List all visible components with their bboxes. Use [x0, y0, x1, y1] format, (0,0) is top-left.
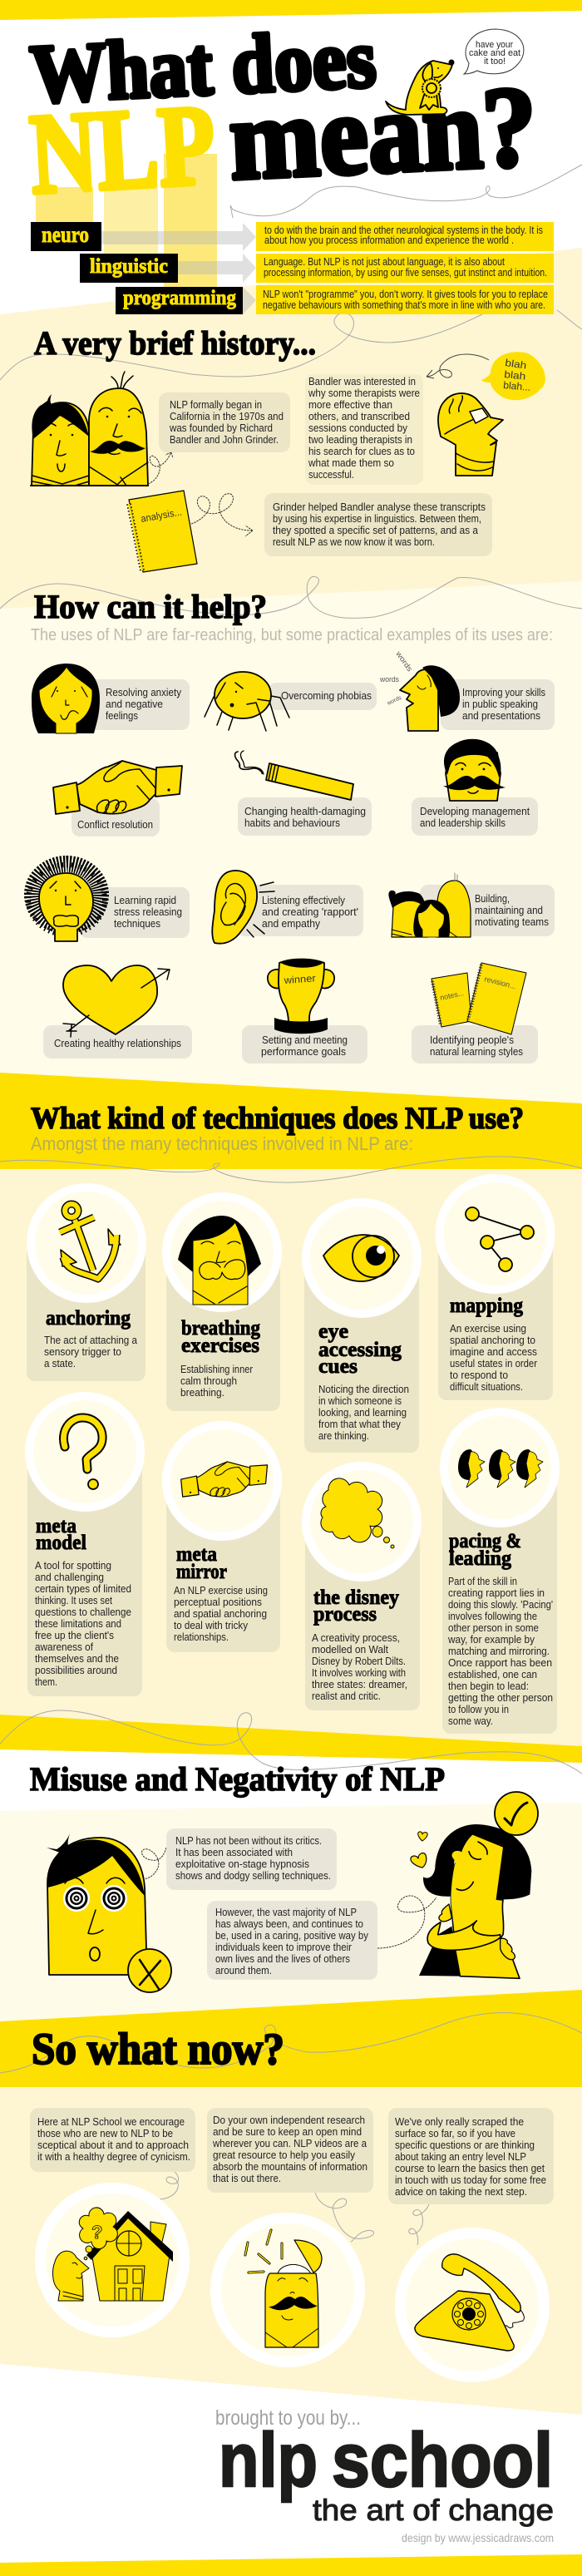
icon: cigarette: [235, 751, 353, 800]
note: formally began: NLP formally began in: [170, 398, 262, 411]
card: meta mirror: [162, 1421, 282, 1652]
bubble: phobias: [268, 683, 377, 710]
definition: neuro: [256, 222, 554, 251]
footer: the art of change: the art of change: [313, 2493, 554, 2527]
icon: trophy: winner: [283, 972, 316, 986]
help item: goals: Setting and meeting: [262, 1034, 348, 1046]
title: NLP: NLP: [27, 81, 218, 218]
help item: teams: motivating teams: [475, 915, 549, 928]
squiggle from critics note: [141, 1848, 166, 1879]
icon: trophy: [268, 960, 334, 1034]
card: meta mirror: An NLP exercise using: [174, 1584, 268, 1596]
card: meta model: certain types of limited: [35, 1582, 131, 1595]
note: research: absorb the mountains of information: [213, 2160, 367, 2173]
arrow: neuro: [97, 223, 256, 251]
icon: hugging woman: [419, 1824, 531, 1978]
help item: anxiety: Resolving anxiety: [106, 686, 181, 698]
card: the disney process: It involves working with: [312, 1666, 406, 1679]
card: pacing and leading: to follow you in: [448, 1703, 509, 1715]
card: mapping: to respond to: [450, 1369, 508, 1381]
card: the disney process: realist and critic.: [312, 1690, 381, 1702]
note: Bandler: more effective than: [308, 398, 392, 411]
note: critics: It has been associated with: [175, 1846, 293, 1858]
note: formally began: was founded by Richard: [169, 422, 273, 434]
card: pacing and leading: involves following the: [448, 1610, 537, 1622]
background: techniques area: [0, 1169, 582, 1751]
icon: hearts: [411, 1832, 427, 1868]
card: anchoring: [27, 1183, 146, 1381]
card: pacing and leading: way, for example by: [447, 1633, 535, 1646]
definition: linguistic: [256, 254, 554, 283]
card: eye accessing cues: accessing: [318, 1339, 402, 1361]
bubble: teams: [420, 885, 555, 936]
help item: learning styles: Identifying people's: [430, 1034, 514, 1046]
card: meta model: A tool for spotting: [35, 1559, 111, 1572]
words floating: [379, 649, 414, 707]
help item: habits: Changing health-damaging: [244, 805, 366, 817]
note: Grinder: by using his expertise in linguistics. Between them,: [273, 512, 481, 525]
note: get in touch: specific questions or are thinking: [395, 2139, 535, 2151]
note: get in touch: surface so far, so if you have: [395, 2127, 515, 2139]
help item: stress: stress releasing: [114, 906, 182, 918]
label: neuro: [31, 222, 101, 251]
card: pacing and leading: Part of the skill in: [448, 1575, 517, 1587]
help item: listening: [212, 871, 363, 944]
card: meta mirror: perceptual positions: [174, 1596, 262, 1608]
speech bubble: have your cake: [464, 29, 524, 74]
label: linguistic: [80, 254, 178, 283]
help item: relationships: [43, 965, 192, 1059]
icon: team of three: [388, 873, 471, 937]
help item: habits: [235, 751, 372, 836]
background: top yellow band: [0, 0, 582, 20]
help item: goals: performance goals: [261, 1045, 346, 1058]
background: pale band: [0, 581, 582, 1103]
footer: brought to you by: brought to you by...: [215, 2406, 361, 2430]
card: pacing and leading: Once rapport has been: [448, 1656, 552, 1669]
icon: analysis notebook: [129, 491, 197, 572]
card: pacing and leading: getting the other person: [448, 1691, 553, 1704]
card: pacing and leading: pacing &: [449, 1530, 521, 1552]
speech bubble: blah blah blah: blah: [505, 357, 527, 372]
icon: question mark: [63, 1418, 102, 1489]
label: programming: programming: [123, 287, 236, 309]
speech bubble: blah blah blah: [481, 352, 545, 400]
note: Grinder: [264, 493, 492, 556]
note: critics: NLP has not been without its critics.: [175, 1834, 322, 1847]
help item: listening: and creating 'rapport': [262, 906, 358, 918]
subheading: techniques: Amongst the many techniques involved in NLP are:: [31, 1133, 413, 1154]
note: sceptical: Here at NLP School we encourage: [37, 2115, 185, 2128]
bubble: conflict: [72, 798, 160, 836]
icon: heart with arrow: [63, 965, 170, 1037]
note: sceptical: it with a healthy degree of cynicism.: [37, 2150, 190, 2163]
heading: techniques: What kind of techniques does NLP use?: [31, 1102, 524, 1136]
card: the disney process: process: [313, 1603, 377, 1626]
words floating: words: [386, 695, 403, 707]
bubble: speaking: [441, 679, 555, 730]
card: the disney process: three states: dreamer,: [312, 1678, 407, 1690]
card: meta model: [25, 1392, 145, 1696]
footer: nlp school logo: nlp: [219, 2418, 318, 2503]
icon: spider: [205, 672, 289, 731]
title columns: [36, 154, 217, 289]
card: anchoring: a state.: [44, 1357, 76, 1369]
card: eye accessing cues: cues: [318, 1355, 358, 1378]
bubble: management: [412, 797, 538, 836]
note: get in touch: We've only really scraped the: [395, 2115, 524, 2128]
card: eye accessing cues: are thinking.: [318, 1429, 369, 1442]
help item: stress: techniques: [114, 917, 160, 930]
card: eye accessing cues: from that what they: [318, 1418, 401, 1430]
card: eye accessing cues: looking, and learning: [318, 1406, 407, 1419]
note: positive use: own lives and the lives of others: [215, 1952, 350, 1965]
note: get in touch: advice on taking the next step.: [395, 2185, 527, 2198]
help item: conflict: [53, 761, 182, 836]
icon: moustache man: [443, 739, 506, 801]
note: formally began: California in the 1970s and: [170, 410, 284, 422]
bubble: listening: [237, 885, 363, 936]
card: breathing exercises: [162, 1192, 282, 1411]
card: mapping: mapping: [450, 1295, 523, 1317]
card: breathing exercises: calm through: [180, 1374, 237, 1387]
card: mapping: [436, 1174, 555, 1400]
speech bubble: blah blah blah: blah: [504, 368, 526, 382]
note: Bandler: what made them so: [308, 456, 394, 469]
help item: phobias: Overcoming phobias: [281, 689, 372, 702]
note: research: and be sure to keep an open mind: [213, 2125, 362, 2138]
icon: thinking head and cloud: [53, 2208, 117, 2301]
card: pacing and leading: matching and mirroring.: [448, 1645, 550, 1657]
speech bubble: have your cake: cake and eat: [469, 48, 520, 58]
card: meta model: questions to challenge: [35, 1606, 131, 1618]
note: positive use: be, used in a caring, positive way by: [215, 1929, 368, 1942]
card: breathing exercises: Establishing inner: [180, 1363, 254, 1375]
help item: management: [412, 739, 538, 836]
note: get in touch: [388, 2108, 554, 2204]
card: mapping: An exercise using: [450, 1322, 526, 1335]
background: yellow so-what band: [0, 1990, 582, 2087]
title: mean?: mean?: [226, 62, 540, 204]
card: pacing and leading: then begin to lead:: [448, 1680, 529, 1692]
note: positive use: individuals keen to improve their: [215, 1941, 353, 1953]
icon: anchor: [60, 1204, 121, 1279]
heading: misuse: Misuse and Negativity of NLP: [30, 1760, 445, 1798]
help item: public speaking: in public speaking: [462, 698, 538, 710]
definition: programming: [256, 285, 554, 314]
card: eye accessing cues: eye: [318, 1320, 348, 1343]
card: meta model: meta: [36, 1515, 76, 1537]
card: meta model: model: [36, 1532, 86, 1554]
icon: mapping nodes: [466, 1207, 534, 1271]
help item: anxiety: [32, 664, 190, 733]
card: meta model: themselves and the: [35, 1652, 119, 1665]
icon: analysis notebook: analysis...: [140, 506, 183, 525]
icon: hypnotised man: [47, 1833, 146, 1975]
note: Bandler: [305, 374, 423, 485]
circle: open-minded man: [210, 2213, 365, 2367]
note: sceptical: sceptical about it and to approach: [37, 2139, 189, 2151]
note: positive use: [207, 1901, 377, 1980]
help item: management: and leadership skills: [420, 817, 506, 829]
bubble: anxiety: [83, 679, 190, 730]
definition: neuro: about how you process information and experience the world .: [264, 234, 514, 246]
bubble: learning styles: [412, 1025, 538, 1063]
icon: thinking head and cloud: ?: [91, 2222, 102, 2243]
note: formally began: [159, 392, 290, 452]
label: neuro: neuro: [42, 222, 89, 247]
card: meta mirror: to deal with tricky: [174, 1619, 248, 1631]
note: Grinder: they spotted a specific set of patterns, and as a: [273, 524, 479, 536]
help item: conflict: Conflict resolution: [77, 818, 153, 831]
card: meta model: these limitations and: [35, 1617, 121, 1630]
note: Bandler: others, and transcribed: [308, 410, 410, 422]
card: pacing and leading: creating rapport lies in: [448, 1587, 545, 1599]
icon: thought cloud: [321, 1478, 394, 1548]
icon: dog with rosette: [386, 60, 454, 115]
heading: How can it help: How can it help?: [34, 588, 267, 625]
label: linguistic: linguistic: [90, 255, 168, 278]
note: research: that is out there.: [213, 2172, 281, 2184]
help item: anxiety: feelings: [106, 709, 138, 722]
background: cream band: [0, 248, 582, 609]
icon: breathing face: [178, 1216, 261, 1305]
icon: ear: [212, 871, 274, 944]
icon: notes and revision books: [432, 963, 526, 1034]
note: research: wherever you can. NLP videos are a: [212, 2137, 367, 2149]
help item: public speaking: Improving your skills: [462, 686, 545, 698]
help item: public speaking: [379, 649, 555, 731]
note: positive use: around them.: [215, 1964, 272, 1976]
note: Bandler: two leading therapists in: [308, 433, 412, 446]
note: research: [207, 2108, 373, 2193]
card: eye accessing cues: Noticing the direction: [318, 1383, 409, 1395]
icon: open head man: [245, 2230, 322, 2347]
help item: teams: maintaining and: [475, 904, 543, 916]
card: breathing exercises: exercises: [181, 1335, 259, 1357]
icon: head with glasses: [438, 393, 503, 476]
card: meta mirror: and spatial anchoring: [174, 1607, 267, 1620]
squiggle arrow from bubble: [427, 354, 489, 378]
note: critics: shows and dodgy selling techniques.: [175, 1869, 331, 1882]
card: meta model: possibilities around: [35, 1664, 117, 1676]
words floating: words: [394, 649, 414, 674]
icon: handshake: [53, 761, 182, 814]
card: meta model: awareness of: [35, 1641, 93, 1653]
help item: learning styles: natural learning styles: [430, 1045, 523, 1058]
card: breathing exercises: breathing: [181, 1317, 260, 1340]
card: meta model: them.: [35, 1675, 57, 1688]
speech bubble: have your cake: it too!: [484, 57, 506, 67]
icon: eye: [323, 1235, 399, 1281]
icon: three profile faces: [458, 1449, 543, 1488]
help item: phobias: [205, 672, 377, 731]
note: critics: [166, 1828, 337, 1890]
card: meta model: thinking. It uses set: [35, 1594, 112, 1606]
note: Bandler: why some therapists were: [308, 387, 420, 399]
note: get in touch: in touch with us today for some free: [395, 2174, 546, 2186]
note: positive use: has always been, and continues to: [215, 1917, 363, 1930]
help item: goals: [242, 960, 367, 1063]
card: pacing and leading: some way.: [448, 1715, 493, 1727]
arrow: programming: [243, 287, 256, 314]
card: meta mirror: relationships.: [174, 1631, 229, 1643]
note: Bandler: Bandler was interested in: [308, 375, 416, 387]
help item: learning styles: [412, 963, 538, 1063]
card: eye accessing cues: in which someone is: [318, 1394, 402, 1407]
note: critics: exploitative on-stage hypnosis: [175, 1858, 309, 1870]
background: yellow techniques band: [0, 1073, 582, 1169]
background: bottom yellow band: [0, 2554, 582, 2576]
squiggle to hugging woman: [377, 1896, 436, 1948]
bubble: relationships: [43, 1025, 192, 1059]
note: Grinder: result NLP as we now know it was born.: [273, 535, 435, 548]
circle: thinking about house: [35, 2183, 190, 2337]
note: positive use: However, the vast majority of NLP: [215, 1906, 357, 1918]
help item: public speaking: and presentations: [462, 709, 540, 722]
squiggle arrow to first note: [148, 452, 173, 484]
background: so-what area: [0, 2087, 582, 2415]
card: anchoring: sensory trigger to: [44, 1345, 121, 1358]
icon: curly hair face: [28, 864, 105, 941]
card: the disney process: A creativity process,: [312, 1631, 400, 1644]
card: meta mirror: meta: [176, 1543, 217, 1566]
icon: house: [86, 2211, 173, 2301]
note: formally began: Bandler and John Grinder.: [170, 433, 279, 446]
note: Bandler: successful.: [308, 468, 354, 481]
card: pacing and leading: other person in some: [448, 1621, 539, 1634]
help item: habits: habits and behaviours: [244, 817, 340, 829]
note: sceptical: those who are new to NLP to be: [37, 2127, 173, 2139]
speech bubble: blah blah blah: blah...: [503, 379, 531, 393]
card: anchoring: The act of attaching a: [44, 1334, 138, 1346]
background: white misuse band: [0, 1749, 582, 1811]
card: meta mirror: mirror: [176, 1561, 227, 1583]
help item: stress: [28, 864, 190, 941]
help item: relationships: Creating healthy relationships: [54, 1037, 181, 1049]
footer: nlp school logo: [219, 2418, 553, 2503]
card: meta model: free up the client's: [35, 1629, 114, 1641]
note: get in touch: course to learn the basics then get: [395, 2162, 545, 2174]
help item: management: Developing management: [420, 805, 530, 817]
icon: tick badge: [495, 1792, 538, 1835]
circle: telephone: [395, 2228, 550, 2382]
card: the disney process: modelled on Walt: [312, 1643, 388, 1656]
icon: notes and revision books: revision...: [484, 975, 517, 990]
note: Bandler: sessions conducted by: [308, 422, 407, 434]
note: Bandler: his search for clues as to: [308, 445, 415, 457]
bubble: goals: [242, 1025, 367, 1063]
bubble: stress: [79, 887, 190, 938]
card: the disney process: [302, 1462, 422, 1710]
arrow: linguistic: [178, 254, 256, 283]
icon: worried woman: [32, 664, 100, 733]
icon: cross badge: [128, 1949, 171, 1992]
note: get in touch: about taking an entry level NLP: [395, 2150, 526, 2163]
bubble: habits: [238, 797, 372, 836]
card: pacing and leading: [440, 1408, 560, 1734]
card: pacing and leading: doing this slowly. 'Pacing': [448, 1598, 553, 1611]
footer: nlp school logo: school: [332, 2418, 553, 2503]
definition: linguistic: Language. But NLP is not just about language, it is also about: [264, 255, 505, 268]
card: pacing and leading: leading: [449, 1547, 511, 1570]
card: eye accessing cues: [302, 1198, 422, 1453]
card: mapping: spatial anchoring to: [450, 1334, 535, 1346]
card: pacing and leading: established, one can: [448, 1668, 537, 1680]
card: anchoring: anchoring: [46, 1307, 131, 1330]
card: mapping: useful states in order: [450, 1357, 538, 1369]
card: meta model: and challenging: [35, 1571, 104, 1583]
note: research: Do your own independent research: [213, 2114, 365, 2126]
heading: So what now: So what now?: [32, 2024, 284, 2074]
title: What does: What does: [28, 12, 378, 121]
icon: Bandler and Grinder heads: [31, 372, 148, 486]
icon: small handshake: [181, 1462, 268, 1497]
card: the disney process: the disney: [313, 1587, 399, 1609]
note: research: great resource to help you easily: [213, 2149, 355, 2161]
card: mapping: difficult situations.: [450, 1380, 523, 1393]
card: the disney process: Disney by Robert Dilts.: [312, 1655, 406, 1667]
words floating: words: [379, 675, 399, 683]
card: mapping: imagine and access: [450, 1345, 537, 1358]
background: pale misuse band: [0, 1803, 582, 2021]
help item: anxiety: and negative: [106, 698, 163, 710]
squiggle arrow from notebook: [191, 494, 253, 536]
note: sceptical: [30, 2108, 195, 2172]
icon: speaking woman: [400, 665, 460, 731]
help item: listening: and empathy: [262, 917, 320, 930]
card: breathing exercises: breathing.: [180, 1386, 224, 1399]
help item: teams: [388, 873, 555, 937]
help item: stress: Learning rapid: [114, 894, 176, 906]
background: yellow divider band: [0, 1715, 582, 1763]
note: Grinder: Grinder helped Bandler analyse these transcripts: [273, 501, 486, 513]
speech bubble: have your cake: have your: [476, 40, 513, 50]
footer: design credit: design by www.jessicadraws.com: [402, 2531, 554, 2544]
icon: rotary telephone: [415, 2254, 524, 2351]
heading: A very brief history: A very brief history...: [34, 324, 316, 362]
icon: notes and revision books: notes...: [439, 989, 465, 1002]
help item: teams: Building,: [475, 892, 510, 905]
help item: listening: Listening effectively: [262, 894, 345, 906]
